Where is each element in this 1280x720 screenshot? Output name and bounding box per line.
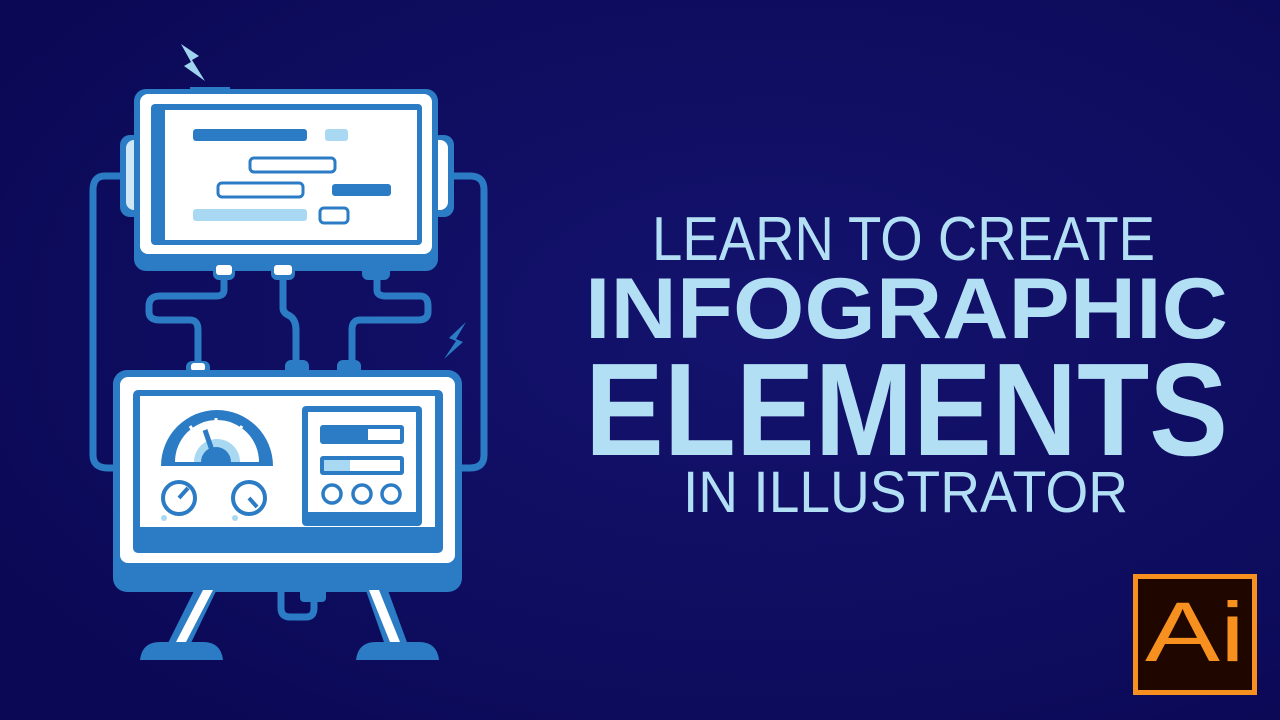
right control panel (302, 406, 422, 526)
knobs (163, 482, 195, 514)
icon: lightning top (181, 44, 205, 81)
icon: Adobe Illustrator logo: Ai (1145, 585, 1245, 679)
gauge (161, 410, 273, 466)
legs (140, 585, 439, 660)
headline: INFOGRAPHIC: INFOGRAPHIC (585, 261, 1228, 357)
top monitor (120, 87, 454, 280)
bottom monitor (113, 360, 462, 592)
subtitle line 1: LEARN TO CREATE (652, 205, 1155, 274)
wires (93, 176, 484, 617)
title text (585, 205, 1228, 525)
subtitle line 2: IN ILLUSTRATOR (683, 460, 1128, 525)
illustration: connected machine (93, 44, 484, 660)
icon: Adobe Illustrator logo (1133, 574, 1257, 695)
icon: lightning right (444, 322, 466, 359)
